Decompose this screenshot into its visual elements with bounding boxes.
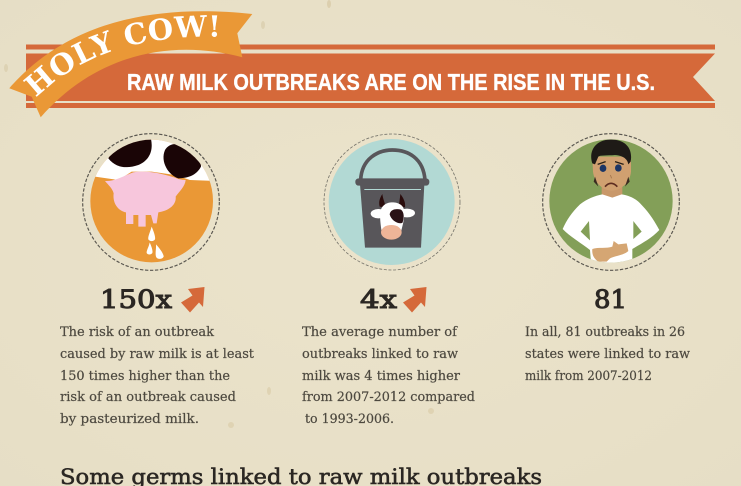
icon: bucket circle <box>324 134 460 270</box>
description: by pasteurized milk. <box>60 412 199 427</box>
number: 81 <box>594 285 627 314</box>
banner: raw milk outbreaks <box>26 44 715 108</box>
icon: up arrow <box>403 287 426 312</box>
icon: udder circle <box>83 134 219 270</box>
description: In all, 81 outbreaks in 26 <box>525 325 685 340</box>
icon: up arrow <box>181 287 204 312</box>
description: from 2007-2012 compared <box>302 390 475 405</box>
stat column: 4x <box>302 134 479 427</box>
description: The average number of <box>302 325 458 340</box>
description: to 1993-2006. <box>305 412 394 427</box>
description: caused by raw milk is at least <box>60 347 255 362</box>
description: milk from 2007-2012 <box>525 369 652 384</box>
icon: sick person circle <box>543 134 679 270</box>
description: outbreaks linked to raw <box>302 347 458 362</box>
description: 150 times higher than the <box>60 369 230 384</box>
description: risk of an outbreak caused <box>60 390 236 405</box>
number: 150x <box>100 285 172 314</box>
banner headline: RAW MILK OUTBREAKS ARE ON THE RISE IN THE U.S. <box>127 69 655 95</box>
description: states were linked to raw <box>525 347 690 362</box>
description: milk was 4 times higher <box>302 369 461 384</box>
number: 4x <box>360 285 397 314</box>
stat column: 150x <box>60 134 258 427</box>
stat column: 81 <box>525 134 694 384</box>
description: The risk of an outbreak <box>60 325 214 340</box>
ribbon title: HOLY COW! <box>23 15 218 97</box>
ribbon: Holy Cow <box>9 11 252 118</box>
